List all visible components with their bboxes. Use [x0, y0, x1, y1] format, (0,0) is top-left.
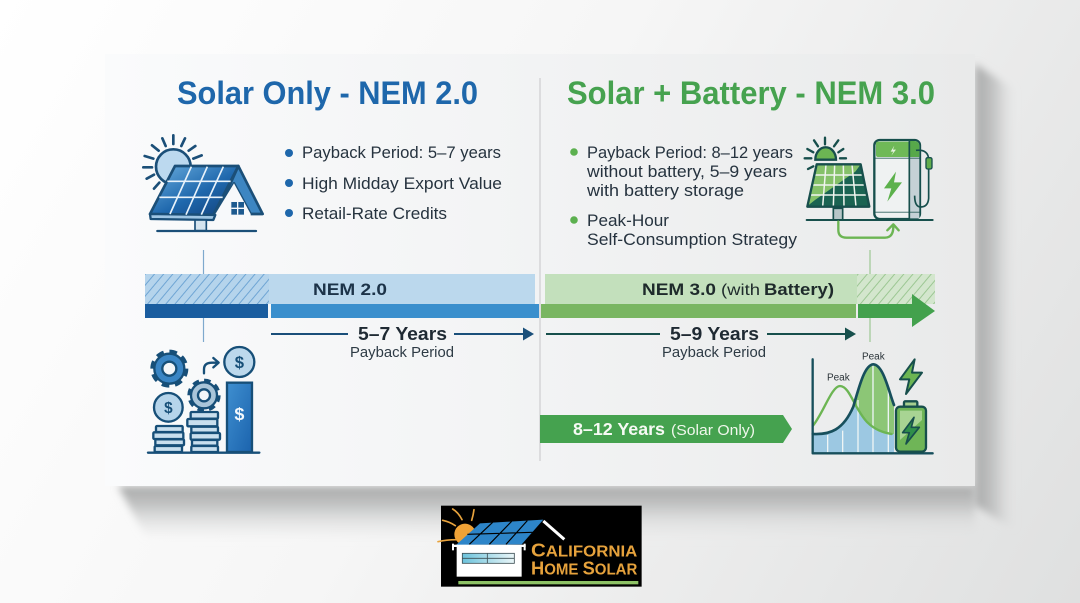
connector: right upper	[869, 250, 871, 276]
arrow: 5-9 years payback: 5–9 Years	[670, 324, 759, 344]
label: NEM 3.0 with battery: Battery)	[764, 280, 834, 299]
chart: peak curves and battery	[813, 351, 933, 453]
bullet list: solar only: Retail-Rate Credits	[302, 205, 447, 223]
banner: 8-12 years solar only: (Solar Only)	[671, 422, 755, 439]
arrow: 5-7 years payback: 5–7 Years	[358, 324, 447, 344]
bullet list: solar plus battery	[570, 144, 798, 249]
arrow: 5-7 years payback	[271, 324, 534, 361]
label: second peak: Peak	[862, 351, 885, 362]
arrow: 5-9 years payback	[546, 324, 856, 361]
label: NEM 3.0 with battery: (with	[721, 282, 760, 299]
icon: coins gears and growth bar	[148, 347, 259, 453]
icon: coins gears and growth bar: $	[235, 353, 245, 372]
bullet list: solar only	[285, 144, 502, 223]
heading: solar plus battery: Solar + Battery - NEM 3.0	[567, 75, 935, 111]
arrow: timeline end	[858, 294, 935, 327]
bullet list: solar only: Payback Period: 5–7 years	[302, 144, 501, 162]
bullet list: solar plus battery: with battery storage	[586, 182, 744, 200]
bullet list: solar plus battery: without battery, 5–9 years	[586, 163, 787, 181]
icon: solar panel on house	[143, 135, 263, 231]
logo: California Home Solar: CALIFORNIA	[531, 540, 637, 561]
icon: coins gears and growth bar: $	[234, 404, 244, 424]
connector: left upper	[202, 250, 204, 276]
connector: left lower	[202, 318, 204, 342]
logo: California Home Solar: HOME SOLAR	[531, 557, 637, 578]
icon: coins gears and growth bar: $	[164, 400, 173, 417]
arrow: 5-7 years payback: Payback Period	[350, 345, 454, 361]
heading: solar only: Solar Only - NEM 2.0	[177, 75, 478, 111]
banner: 8-12 years solar only: 8–12 Years	[573, 419, 665, 439]
logo: California Home Solar	[438, 506, 642, 587]
connector: right lower	[869, 318, 871, 342]
label: first peak: Peak	[827, 373, 850, 384]
bullet list: solar plus battery: Self-Consumption Strategy	[587, 231, 798, 249]
timeline: NEM 2.0 band	[145, 274, 539, 318]
label: NEM 3.0 with battery	[642, 280, 834, 299]
timeline: NEM 3.0 band	[541, 274, 935, 327]
icon: solar panel and battery	[805, 138, 933, 238]
bullet list: solar only: High Midday Export Value	[302, 175, 502, 193]
panel: comparison card	[105, 54, 975, 486]
bullet list: solar plus battery: Payback Period: 8–12 years	[587, 144, 793, 162]
banner: 8-12 years solar only	[540, 415, 792, 443]
label: NEM 3.0 with battery: NEM 3.0	[642, 280, 716, 299]
label: NEM 2.0: NEM 2.0	[313, 280, 387, 299]
bullet list: solar plus battery: Peak-Hour	[587, 212, 670, 230]
arrow: 5-9 years payback: Payback Period	[662, 345, 766, 361]
